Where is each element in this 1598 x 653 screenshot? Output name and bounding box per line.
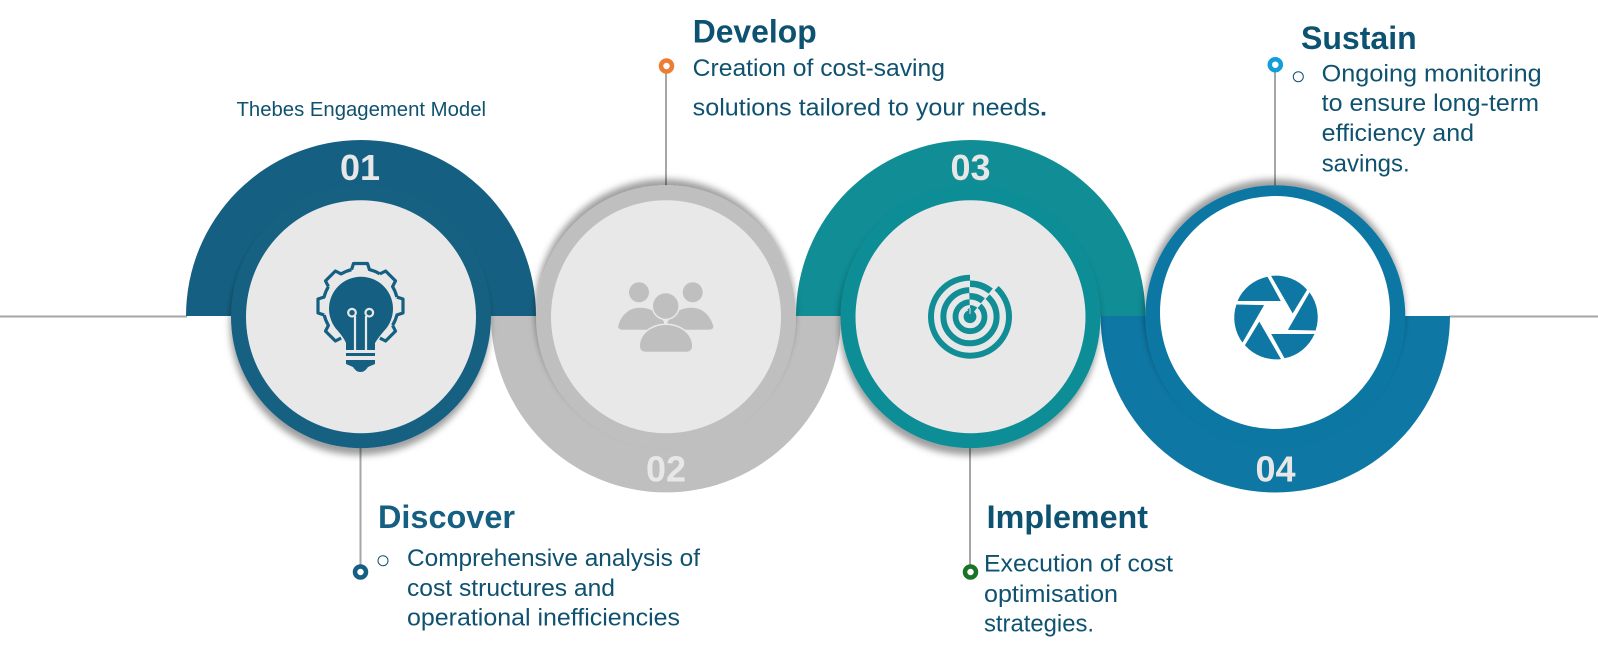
body: develop: solutions tailored to your needs . — [693, 94, 1047, 121]
inner disc 04 — [1160, 196, 1390, 429]
heading: discover: Discover — [378, 499, 515, 535]
icon: people group — [618, 282, 713, 352]
body: develop: Creation of cost-saving — [693, 55, 945, 82]
body: sustain: savings. — [1322, 151, 1410, 178]
semicircle 04 — [1101, 316, 1450, 492]
body: discover: Comprehensive analysis of — [407, 545, 700, 572]
icon: lightbulb in gear — [317, 262, 404, 372]
ring 03 — [840, 185, 1100, 448]
heading: sustain: Sustain — [1301, 20, 1417, 56]
ring 01 — [231, 185, 491, 448]
number 03: 03 — [950, 147, 991, 188]
body: discover — [407, 545, 700, 632]
right timeline line — [1449, 316, 1598, 318]
body: discover: operational inefficiencies — [407, 605, 680, 632]
semicircle 02 — [491, 316, 841, 492]
body: implement — [984, 551, 1173, 638]
icon: radar target — [915, 262, 1025, 372]
connector: develop — [661, 60, 672, 186]
number 04: 04 — [1255, 449, 1296, 490]
bullet: discover — [378, 556, 388, 566]
inner disc 01 — [246, 200, 476, 433]
title: Thebes Engagement Model — [236, 98, 486, 121]
connector: sustain — [1270, 59, 1281, 186]
ring 02 — [536, 185, 796, 448]
connector: discover — [355, 445, 366, 578]
text block: develop — [693, 14, 1047, 121]
text block: implement — [984, 499, 1173, 638]
text block: sustain — [1293, 20, 1542, 178]
icon: camera aperture — [1221, 264, 1331, 371]
connector: implement — [965, 445, 976, 578]
body: sustain: Ongoing monitoring — [1322, 61, 1542, 88]
semicircle 03 — [796, 140, 1145, 316]
body: implement: strategies. — [984, 611, 1094, 638]
body: implement: Execution of cost — [984, 551, 1173, 578]
text block: discover — [378, 499, 700, 632]
body: discover: cost structures and — [407, 575, 615, 602]
body: sustain: to ensure long-term — [1322, 90, 1539, 117]
body: sustain: efficiency and — [1322, 120, 1474, 147]
body: implement: optimisation — [984, 581, 1118, 608]
inner disc 02 — [551, 200, 781, 433]
semicircle 01 — [186, 140, 536, 316]
number 01: 01 — [340, 147, 380, 188]
inner disc 03 — [856, 200, 1086, 433]
body: develop — [693, 55, 1047, 121]
heading: develop: Develop — [693, 14, 817, 50]
ring 04 — [1145, 185, 1405, 448]
number 02: 02 — [646, 449, 686, 490]
heading: implement: Implement — [987, 499, 1148, 535]
bullet: sustain — [1293, 72, 1303, 82]
left timeline line — [0, 316, 187, 318]
body: sustain — [1322, 61, 1542, 178]
